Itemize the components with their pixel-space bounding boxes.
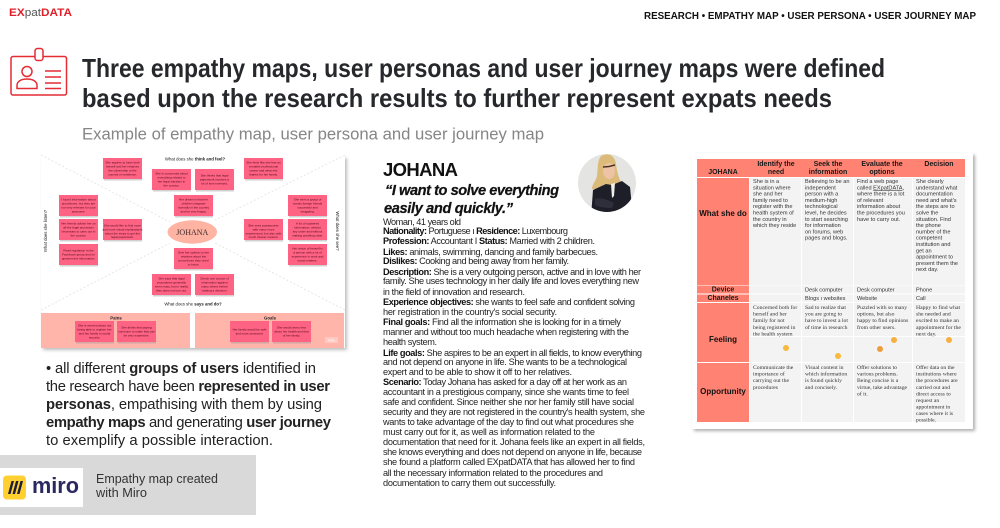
sticky note 14: procedures they need	[179, 258, 209, 262]
persona demographics: Woman, 41 years old	[383, 217, 461, 227]
table row: opportunity: is found quickly	[805, 377, 842, 384]
pains sticky 2: be very expensive.	[124, 334, 150, 338]
table row: what she do: Believing to be an	[805, 179, 849, 185]
persona life goals: and not depend on anyone in life. She wants to be a technological	[383, 357, 627, 367]
persona scenario: wants to take advantage of the day to find out what procedures she	[382, 417, 634, 427]
table row: what she do: which they reside	[752, 223, 796, 229]
table header row: Seek the	[814, 161, 843, 168]
table row: what she do: What she do	[699, 209, 747, 218]
persona scenario: accountant in a prestigious company, since she wants time to feel	[383, 387, 629, 397]
sticky note 10: much clearer content.	[249, 235, 279, 239]
table row: opportunity: carrying out the	[753, 378, 789, 384]
table row: feeling: of time in research	[805, 324, 848, 331]
sticky note 11: She sees a group of	[294, 198, 321, 202]
sticky note 1: the citizenship of the	[108, 168, 137, 172]
table row: what she do: the country in	[753, 217, 787, 223]
persona scenario: she knows everything and does not depend on anyone in life, because	[383, 447, 642, 457]
sticky note 7: the country.	[71, 234, 87, 238]
table row: what she do: documentation	[916, 192, 953, 198]
table row: device: Desk computer	[805, 288, 843, 294]
table row: device: Desk computer	[857, 288, 895, 294]
table row: channels: Call	[916, 296, 926, 302]
persona demographics: Profession: Accountant I Status: Married with 2 children.	[383, 236, 595, 246]
table row: opportunity: appointment in	[916, 405, 950, 411]
table row: what she do: family need to	[753, 198, 788, 204]
sticky note 1	[103, 158, 142, 180]
sticky note 15: seem easy, but in reality	[155, 284, 189, 288]
sticky note 3	[195, 169, 234, 192]
persona experience objectives	[383, 297, 635, 317]
sticky note 1: She aspires to have both	[105, 160, 140, 164]
heading: see: What does she see?	[335, 211, 340, 251]
sticky note 5: Her dream is that her	[179, 198, 208, 202]
sticky note 4	[244, 158, 283, 180]
table row: channels	[697, 294, 965, 302]
sticky note 16: Check one source of	[200, 276, 229, 280]
sticky note 12: any order and without	[293, 230, 323, 234]
miro logo	[0, 468, 83, 507]
sticky note 4: enviable professional	[249, 164, 278, 168]
sticky note 4: career and what she	[249, 168, 278, 172]
sticky note 13: a person with a lot of	[293, 250, 322, 254]
sticky note 11: successful and	[297, 206, 318, 210]
heading: listen: What does she listen?	[43, 209, 48, 252]
sticky note 13: experience in work and	[292, 254, 324, 258]
miro caption	[95, 472, 218, 500]
table row: opportunity: virtue, take advantage	[857, 385, 908, 391]
table row: what she do: independent	[805, 185, 836, 191]
persona name: JOHANA	[383, 159, 458, 180]
centre node: Johana	[168, 220, 217, 244]
goals sticky 1: Her family would be safe	[233, 328, 267, 332]
table row: what she do: person with a	[805, 192, 839, 198]
table row: feeling: options, but also	[857, 312, 895, 318]
goals sticky 1	[230, 321, 269, 344]
table row: feeling: Feeling	[709, 335, 737, 344]
text block: description of method: the research have been represented in user	[46, 379, 330, 395]
persona life goals: expert and to be able to show it off to her relatives.	[383, 367, 572, 377]
table header row: Decision	[924, 161, 954, 168]
title: Three empathy maps, user personas and user journey maps were defined	[82, 53, 885, 83]
persona scenario: she found a platform called EXpatDATA that has allowed her to find	[383, 457, 635, 467]
table row: what she do: to start searching	[805, 217, 848, 223]
table row: what she do: the procedures you	[857, 210, 905, 216]
sticky note 6: I found information about	[61, 198, 96, 202]
table row: what she do: pages and blogs.	[805, 236, 848, 242]
pains sticky 1: She is worried about not	[78, 324, 111, 328]
table row: feeling: herself and her	[753, 311, 787, 318]
sticky note 16	[195, 274, 234, 296]
sticky note 3: paperwork involves a	[200, 178, 229, 182]
table row: opportunity: Offer solutions to	[857, 364, 897, 371]
table row: what she do: have to carry out.	[857, 217, 901, 223]
table row: what she do: on forums, web	[805, 229, 843, 235]
pains sticky 1: and her family in social	[79, 332, 111, 336]
table row: feeling: have to invest a lot	[805, 318, 848, 324]
persona life goals: Life goals: She aspires to be an expert in all fields, to know everything	[383, 348, 642, 358]
table row: what she do: the phone	[916, 223, 941, 229]
persona likes and dislikes	[383, 247, 598, 266]
table row: what she do: Find a web page	[857, 179, 898, 185]
table row: what she do: next day.	[916, 267, 939, 273]
title: based upon the research results to further represent expats needs	[82, 83, 832, 113]
sticky note 7	[59, 219, 98, 242]
table header row: Evaluate the	[861, 161, 903, 168]
miro tag	[325, 337, 338, 343]
sticky note 6: purposes.	[72, 210, 85, 214]
persona experience objectives: Experience objectives: she wants to feel safe and confident solving	[383, 297, 635, 307]
persona final goals: manner and without too much headache when registering with the	[383, 327, 629, 337]
table row: channels: Website	[857, 296, 877, 302]
sticky note 11: mostly foreign friends	[293, 202, 323, 206]
sticky note 8: Read regulation in the	[63, 248, 94, 252]
table row: opportunity: possible.	[916, 418, 937, 424]
icon: emoji evaluate high	[891, 337, 897, 343]
table row: what she do: need and what's	[916, 198, 957, 204]
sticky note 12: information, without	[294, 226, 321, 230]
panel: empathy map	[41, 155, 347, 350]
sticky note 8: Facebook group and on	[62, 252, 95, 256]
top navigation breadcrumb: RESEARCH • EMPATHY MAP • USER PERSONA • USER JOURNEY MAP	[644, 11, 976, 22]
title	[82, 53, 885, 113]
sticky note 7: Her friends advise her on	[61, 222, 96, 226]
table row: what she do: called EXpatDATA,	[857, 185, 904, 191]
sticky note 9: She would like to find more	[104, 224, 141, 228]
panel: goals	[195, 313, 344, 348]
sticky note 9: legal paperwork.	[111, 235, 134, 239]
table row: what she do: She is in a	[753, 179, 780, 185]
table row: opportunity: carried out and	[916, 385, 950, 391]
table row: feeling: excited to make an	[916, 318, 959, 324]
pains sticky 1: security.	[89, 336, 100, 340]
sticky note 12	[288, 219, 327, 242]
table row: feeling: you are going to	[805, 312, 842, 318]
persona scenario: Scenario: Today Johana has asked for a day off at her work as an	[383, 377, 627, 387]
table row: opportunity: direct access to	[916, 391, 951, 397]
goals sticky 2	[272, 321, 311, 344]
logo: EXpatDATA: EXpatDATA	[9, 7, 72, 19]
table header row: Identify the	[757, 161, 795, 168]
subtitle: Example of empathy map, user persona and user journey map	[82, 126, 544, 144]
persona scenario: documentation to carry them out successfully.	[383, 478, 556, 488]
table row: opportunity: the procedures are	[916, 378, 958, 384]
sticky note 16: making a decision.	[202, 288, 227, 292]
sticky note 16: many others before	[201, 284, 228, 288]
persona final goals	[383, 317, 629, 347]
persona description: Description: She is a very outgoing person, active and in love with her	[383, 267, 641, 277]
table row: what she do: number of the	[916, 229, 951, 235]
persona scenario	[382, 377, 645, 488]
text block: description of method: personas, empathising with them by using	[46, 397, 322, 413]
table header row: JOHANA	[708, 169, 738, 176]
sticky note 4: She feels like she has an	[246, 160, 281, 164]
table row: opportunity: procedures	[753, 385, 779, 391]
table row: feeling: the health system	[753, 331, 793, 337]
table row: opportunity	[697, 363, 965, 424]
sticky note 2: the country.	[164, 184, 180, 188]
sticky note 5: children integrate	[182, 202, 206, 206]
table row: what she do: get an	[916, 248, 932, 254]
goals sticky 2: She would worry less	[277, 326, 307, 330]
table row: opportunity: cases where it is	[916, 411, 954, 417]
sticky note 5	[174, 195, 213, 218]
miro caption: Empathy map created	[96, 472, 218, 486]
persona description: family. She uses technology in her daily life and loves everything new	[383, 276, 639, 286]
table row: feeling: appointment for the	[916, 324, 961, 331]
icon: id badge	[11, 48, 66, 95]
icon: emoji decision	[946, 337, 952, 343]
table row: feeling: Happy to find what	[916, 304, 960, 311]
persona scenario: security and they are not registered in the country's health system, she	[383, 407, 645, 417]
sticky note 1: herself and her relatives	[106, 164, 139, 168]
table row: opportunity: and concisely.	[805, 385, 838, 391]
sticky note 1: country of residence.	[108, 172, 137, 176]
table row: opportunity: Communicate the	[753, 365, 794, 371]
persona demographics: Nationality: Portuguese ı Residence: Luxembourg	[383, 226, 568, 236]
table row: channels: Chaneles	[707, 295, 739, 302]
sticky note 6: procedures, but they are	[62, 202, 96, 206]
table row: opportunity: importance of	[753, 371, 785, 378]
sticky note 12: making anything clear.	[292, 234, 323, 238]
miro caption: with Miro	[95, 486, 147, 500]
table row: device: Device	[712, 286, 734, 294]
table row: opportunity: Being concise is a	[857, 378, 899, 384]
table row: what she do: the steps are to	[916, 204, 955, 210]
sticky note 15: procedures generally	[157, 280, 186, 284]
sticky note 13: Her vision of herself is	[292, 246, 323, 250]
heading: goals: Goals	[264, 316, 277, 320]
sticky note 8	[59, 244, 98, 266]
panel: user persona	[382, 154, 645, 488]
sticky note 9: and more visual explanations	[102, 228, 143, 232]
sticky note 14: Give her opinion to her	[178, 250, 209, 254]
table row: what she do: where there is a lot	[856, 192, 905, 198]
sticky note 15: She says that legal	[158, 276, 185, 280]
sticky note 11	[288, 195, 327, 218]
heading: think and feel: What does she think and feel?	[165, 156, 225, 162]
sticky note 15	[152, 274, 191, 296]
sticky note 16: information against	[201, 280, 228, 284]
sticky note 3: She thinks that legal	[201, 174, 229, 178]
table row: what she do: She clearly	[916, 179, 944, 185]
table row: feeling: next day.	[916, 331, 937, 337]
sticky note 10	[244, 219, 283, 242]
table row: opportunity: which information	[805, 371, 847, 378]
text block: description of method: empathy maps and generating user journey	[46, 415, 332, 431]
persona final goals: health system.	[383, 337, 437, 347]
persona scenario: documentation that need for it. Johana feels like an expert in all fields,	[383, 437, 645, 447]
table row: what she do: solve the	[916, 210, 938, 216]
persona life goals	[383, 348, 642, 377]
miro tag: miro	[328, 338, 335, 342]
panel: pains	[41, 313, 190, 348]
sticky note 14: to know.	[188, 262, 199, 266]
table row: feeling: family for not	[753, 317, 785, 324]
centre node: Johana: JOHANA	[176, 228, 209, 237]
icon: emoji seek	[835, 353, 841, 359]
sticky note 5: normally in the country	[178, 206, 210, 210]
panel: miro credit	[0, 455, 256, 515]
table row: feeling: Sad to realize that	[805, 305, 846, 311]
persona scenario: must carry out for it, as well as information related to the	[383, 427, 595, 437]
table row: opportunity: institutions where	[916, 372, 957, 378]
table row: what she do: institution and	[916, 242, 951, 248]
miro logo: miro	[32, 473, 79, 498]
table row: what she do: situation. Find	[916, 217, 951, 223]
sticky note 15: they does not turn out.	[156, 288, 187, 292]
table row: what she do: health system of	[753, 210, 794, 216]
persona description: in the field of innovation and research.	[383, 287, 525, 297]
table row: what she do: of relevant	[857, 198, 884, 204]
table row: what she do: level, he decides	[805, 210, 847, 216]
persona quote	[384, 183, 559, 217]
table row: opportunity: Offer data on the	[916, 364, 955, 371]
sticky note 9	[102, 219, 143, 242]
table row: device: Phone	[916, 288, 932, 294]
text block: description of method: to exemplify a possible interaction.	[46, 433, 273, 449]
sticky note 3: lot of time invested.	[201, 182, 228, 186]
sticky note 6	[59, 195, 98, 218]
text block: description of method	[46, 361, 332, 449]
sticky note 11: struggling.	[300, 210, 315, 214]
persona experience objectives: her registration in the country's social security.	[383, 307, 557, 317]
pains sticky 2: someone to make that can	[118, 330, 155, 334]
sticky note 6: not very relevant for your	[61, 206, 96, 210]
goals sticky 2: about her health and that	[274, 330, 309, 334]
sticky note 9: about the steps to get the	[105, 232, 140, 236]
sticky note 14	[174, 248, 213, 270]
sticky note 2: She is concerned about	[155, 172, 188, 176]
table row: what she do	[697, 178, 965, 285]
persona final goals: Final goals: Find all the information she is looking for in a timely	[383, 317, 621, 327]
table header row	[697, 159, 965, 177]
table header row: need	[768, 169, 784, 176]
table row: what she do: register with the	[753, 204, 792, 210]
table row: what she do: technological	[805, 204, 838, 210]
table row: opportunity: Visual content in	[805, 365, 844, 371]
table row: feeling: Puzzled with so many	[857, 305, 907, 311]
table row: what she do: understand what	[916, 185, 958, 191]
table row: what she do: appointment to	[916, 255, 953, 261]
sticky note 7: all the legal processes	[63, 226, 94, 230]
table row: what she do: she and her	[753, 192, 783, 198]
table row: what she do: medium-high	[805, 198, 837, 204]
pains sticky 1: being able to register her	[77, 328, 112, 332]
table header row: information	[809, 169, 847, 176]
table row: feeling: being registered in	[753, 325, 795, 331]
table row: feeling: from other users.	[857, 324, 896, 331]
heading: pains: Pains	[110, 316, 122, 320]
table row: what she do: competent	[916, 236, 943, 242]
table row: opportunity: request an	[916, 398, 939, 404]
sticky note 7: necessary to carry out in	[62, 230, 96, 234]
table row: feeling	[697, 303, 965, 362]
table row: opportunity: Opportunity	[700, 387, 746, 396]
persona likes and dislikes: Dislikes: Cooking and being away from her family.	[383, 256, 569, 266]
goals sticky 2: of her family.	[283, 334, 300, 338]
panel: user journey map	[692, 153, 975, 431]
sticky note 13: social matters.	[298, 258, 318, 262]
table header row: options	[869, 169, 895, 176]
persona demographics	[383, 217, 595, 246]
goals sticky 1: and more protected.	[236, 332, 263, 336]
table row: what she do: for information	[805, 223, 841, 229]
persona scenario: safe and confident. Since neither she nor her family still have social	[383, 397, 634, 407]
table row: what she do: present them the	[916, 261, 958, 267]
pains sticky 2: She thinks that paying	[121, 326, 152, 330]
sticky note 10: with many more	[253, 228, 275, 232]
persona description	[383, 267, 641, 297]
pains sticky 2	[117, 321, 156, 344]
table row: opportunity: of it.	[857, 390, 868, 397]
sticky note 5: and be very happy.	[180, 210, 207, 214]
persona quote: easily and quickly.”	[384, 201, 514, 217]
sticky note 10: experienced, but also with	[246, 232, 282, 236]
persona quote: “I want to solve everything	[385, 183, 559, 199]
text block: description of method: • all different groups of users identified in	[46, 361, 316, 377]
sticky note 2: her legal situation in	[158, 180, 186, 184]
sticky note 4: thanks for her family.	[249, 172, 278, 176]
table row: channels: Blogs ı websites	[805, 296, 846, 302]
sticky note 10: She sees powerpoints	[248, 224, 279, 228]
persona photo	[578, 154, 636, 217]
table row: feeling: she needed and	[916, 312, 951, 318]
sticky note 2	[152, 169, 191, 192]
persona likes and dislikes: Likes: animals, swimming, dancing and family barbecues.	[383, 247, 598, 257]
sticky note 14: relatives about the	[181, 254, 206, 258]
heading: says and do: What does she says and do?	[164, 302, 222, 306]
table row: what she do: information about	[857, 204, 901, 210]
table row: device	[697, 286, 965, 294]
icon: emoji evaluate low	[877, 346, 883, 352]
table row: what she do: situation where	[753, 185, 791, 191]
sticky note 13	[288, 244, 327, 266]
icon: emoji need	[783, 345, 789, 351]
table row: feeling: happy to find opinions	[857, 317, 909, 324]
pains sticky 1	[75, 321, 114, 344]
table row: feeling: Concerned both for	[753, 304, 797, 311]
table row: opportunity: various problems.	[857, 372, 898, 378]
sticky note 2: everything related to	[157, 176, 186, 180]
sticky note 12: A lot of scattered	[296, 222, 319, 226]
sticky note 8: government information.	[62, 256, 95, 260]
persona scenario: all the necessary information related to the procedures and	[383, 468, 603, 478]
